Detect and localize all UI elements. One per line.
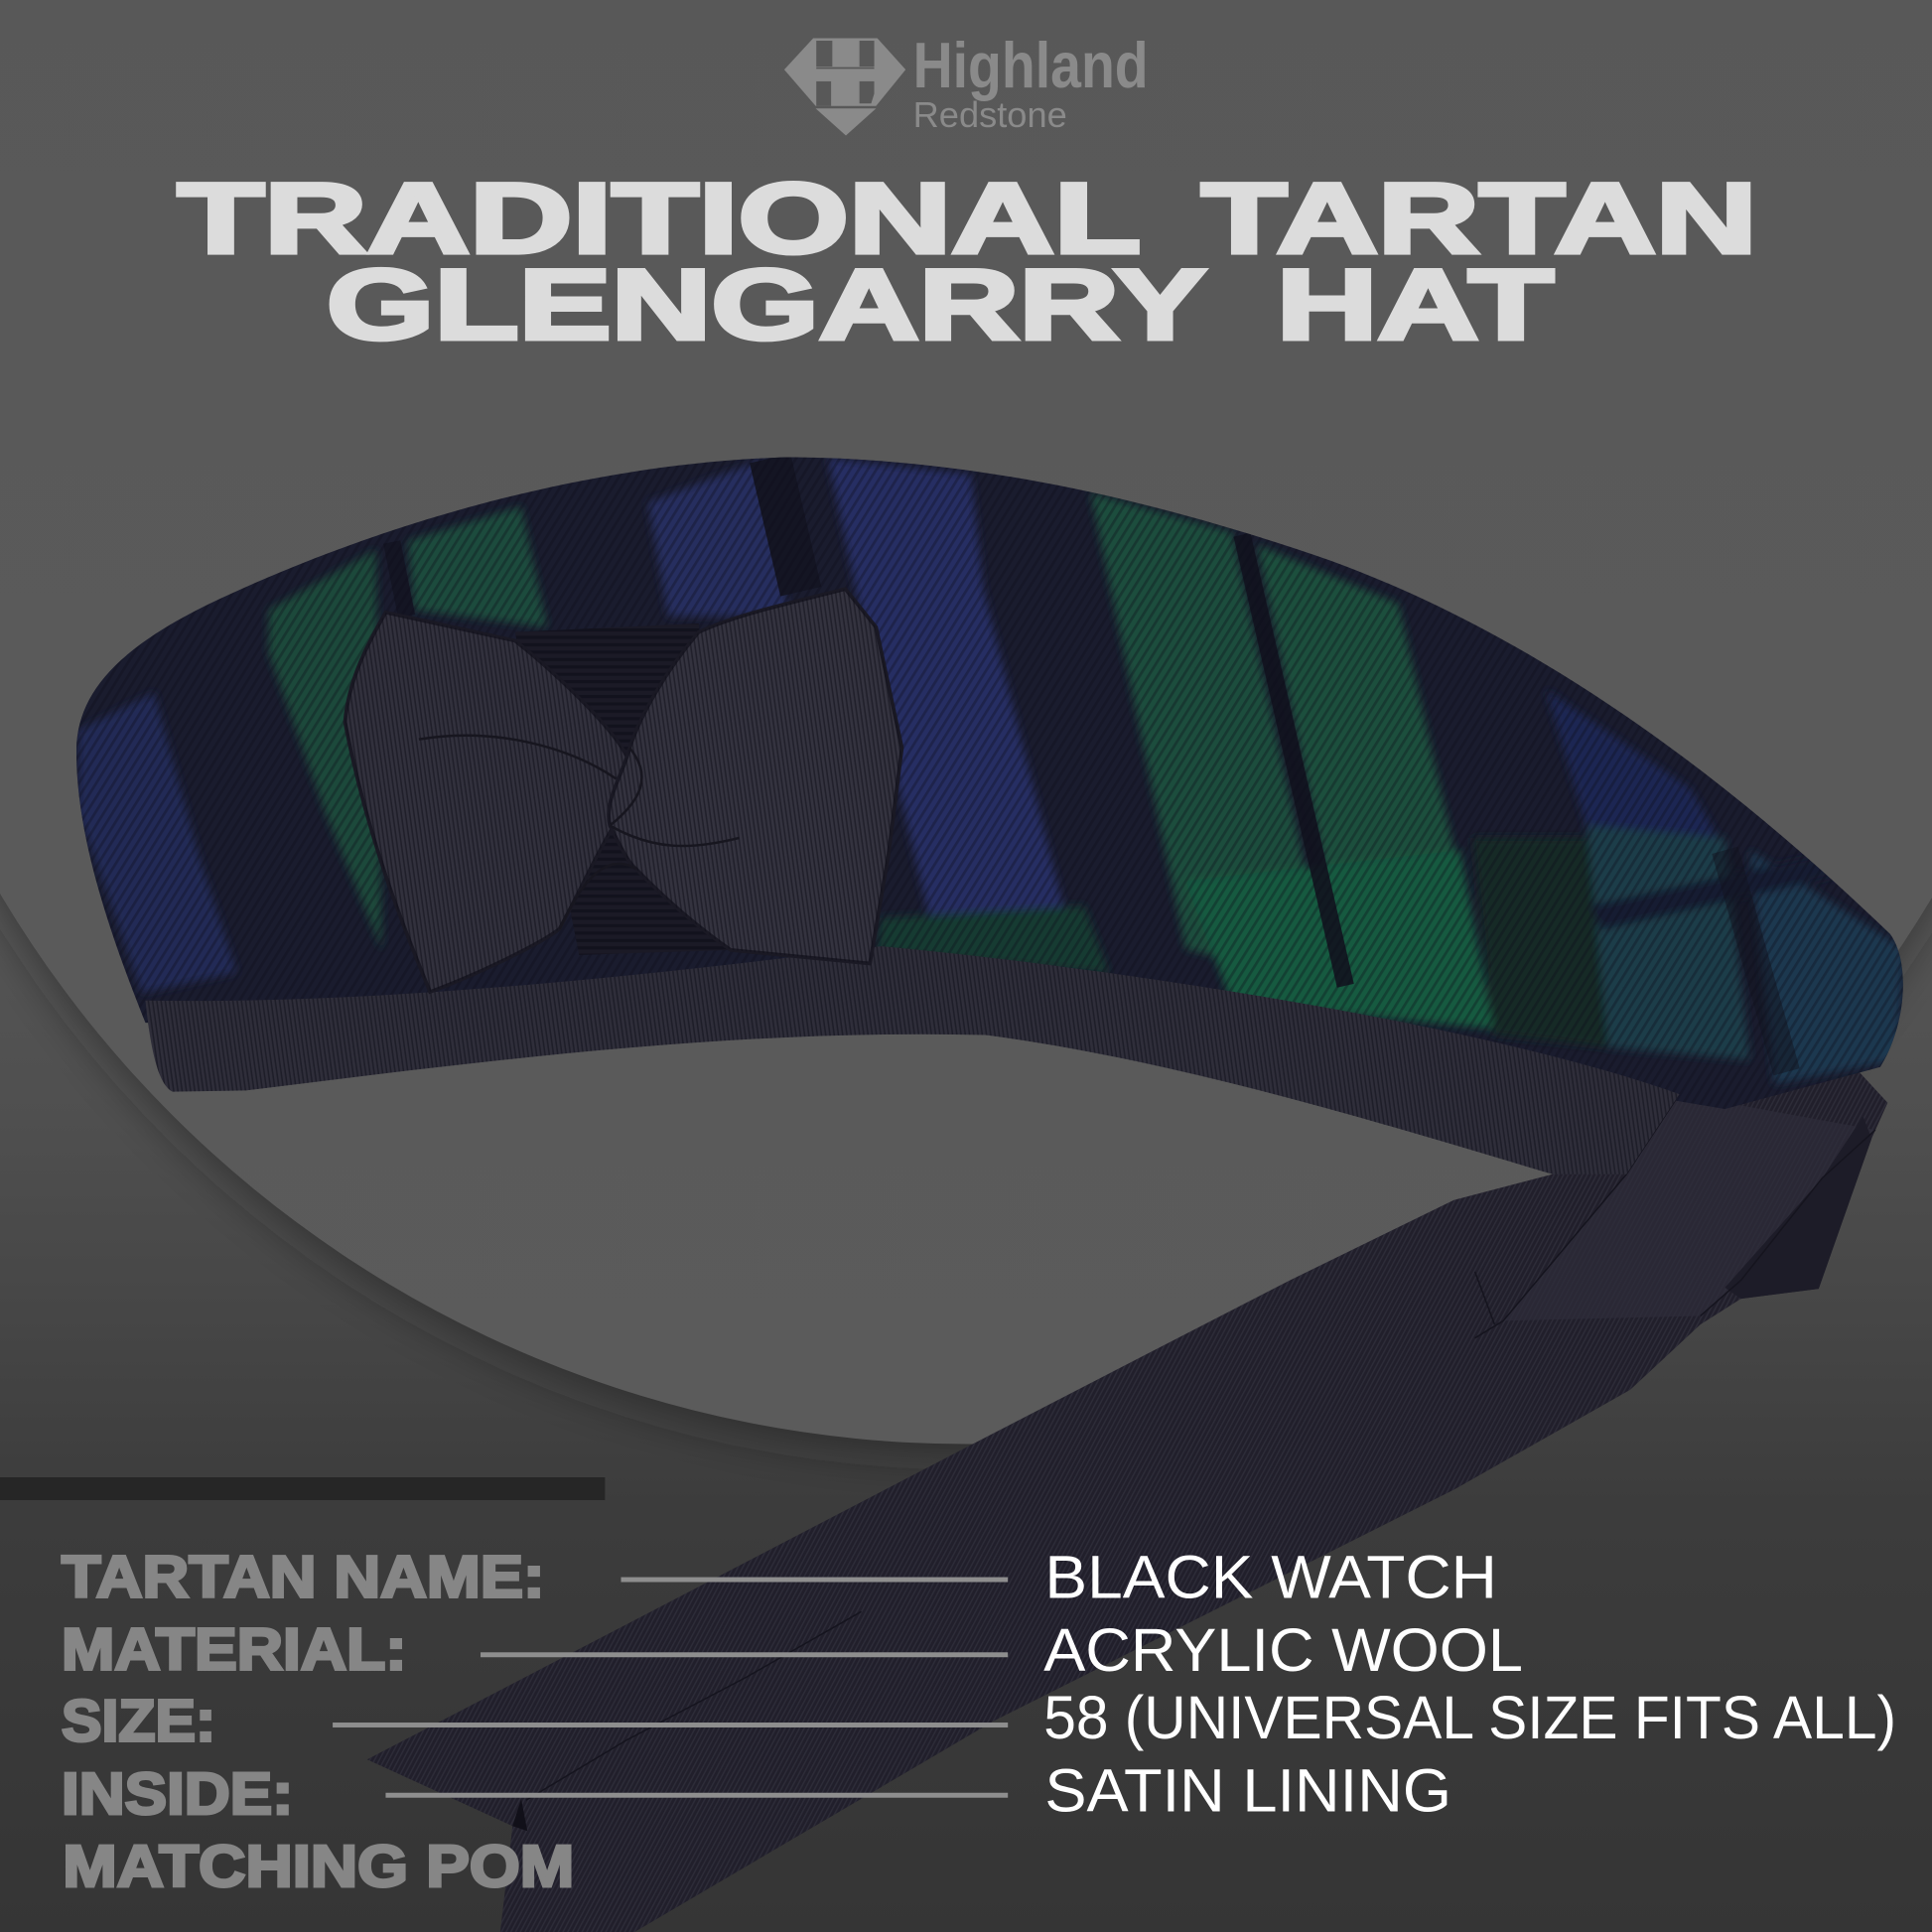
label: matching pom: MATCHING POM: [63, 1833, 574, 1899]
label: inside: INSIDE:: [62, 1760, 293, 1827]
title line 2 word 1: GLENGARRY: [327, 249, 1206, 360]
label: material: MATERIAL:: [62, 1616, 407, 1683]
ribbon dark underside: [1725, 1116, 1871, 1299]
value: acrylic wool: ACRYLIC WOOL: [1043, 1616, 1523, 1684]
ribbon notch: [512, 1799, 527, 1831]
spec list labels: [62, 1543, 574, 1899]
background disc: [0, 0, 1932, 1455]
twill weave texture: [76, 459, 1902, 1086]
logo: Highland Redstone: [784, 30, 1149, 136]
title line 1 word 2: TARTAN: [1201, 163, 1757, 274]
title line 2 word 2: HAT: [1277, 249, 1554, 360]
logo sub-wordmark: Redstone: [913, 94, 1067, 135]
hat bow: [345, 589, 901, 992]
tartan bands: [78, 459, 1903, 1084]
hat ribbon tail: [367, 1054, 1887, 1932]
ribbon fold: lighter panel: [1503, 1094, 1875, 1320]
spec connector lines: [333, 1578, 1008, 1798]
bow knot folds: [419, 736, 740, 929]
label: tartan name: TARTAN NAME:: [62, 1543, 545, 1609]
title: [178, 163, 1757, 360]
bow right wing: [609, 589, 901, 964]
divider bar: [0, 1477, 605, 1500]
value: satin lining: SATIN LINING: [1044, 1756, 1451, 1824]
icon: diamond monogram: [784, 38, 905, 136]
bow left wing: [345, 613, 633, 992]
bow centre band: [515, 623, 731, 955]
value: size universal: 58 (UNIVERSAL SIZE FITS ALL): [1043, 1684, 1896, 1751]
hat crown: tartan body: [50, 431, 1922, 1121]
hat brim band: [145, 946, 1680, 1174]
ribbon seam lines: [526, 1094, 1875, 1800]
dark pin stripes: [1242, 535, 1345, 986]
spec list values: [1043, 1544, 1896, 1824]
value: black watch: BLACK WATCH: [1044, 1544, 1497, 1611]
logo wordmark: Highland: [913, 30, 1149, 101]
label: size: SIZE:: [62, 1688, 215, 1754]
title line 1 word 1: TRADITIONAL: [178, 163, 1141, 274]
